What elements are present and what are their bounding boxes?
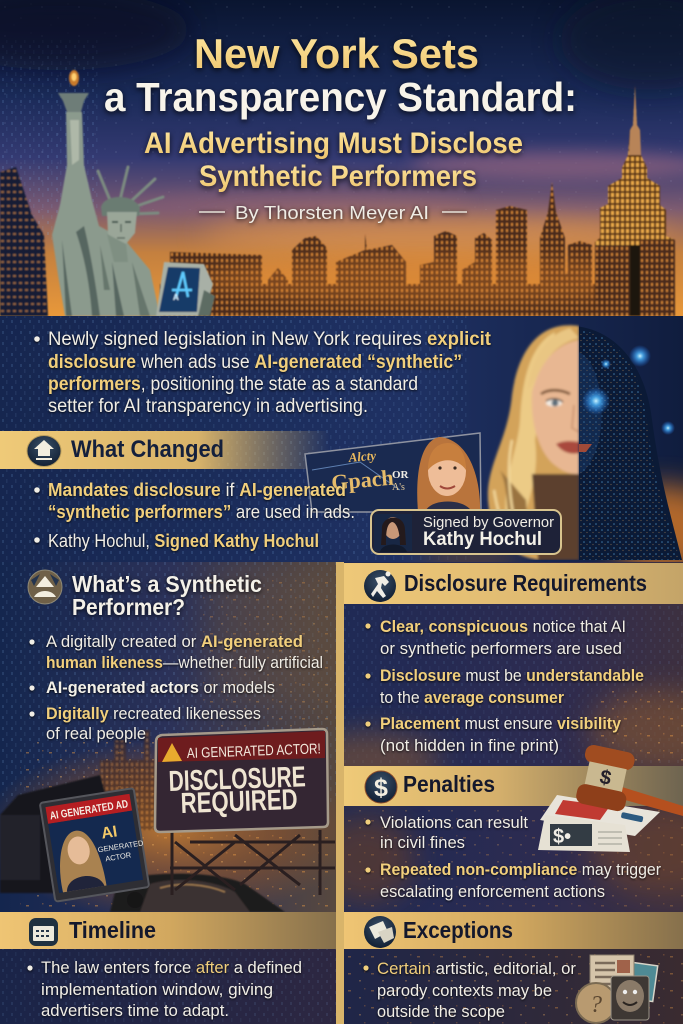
column divider bbox=[336, 562, 344, 1024]
ad mockup card: A's bbox=[392, 482, 405, 493]
monitor: AI generated ad: GENERATED bbox=[97, 838, 145, 854]
illustration: gavel on fine papers bbox=[538, 744, 683, 852]
icon: layered triangle bbox=[28, 570, 62, 604]
icon: AI tablet bbox=[156, 262, 215, 316]
monitor: AI generated ad: AI GENERATED AD bbox=[49, 798, 129, 822]
monitor: AI generated ad bbox=[40, 788, 151, 902]
text: intro bullet: performers, positioning the state as a standard bbox=[48, 374, 418, 395]
text: timeline bullet: The law enters force after a defined bbox=[41, 958, 302, 977]
icon: running figure bbox=[364, 570, 396, 602]
billboard: disclosure required: DISCLOSURE bbox=[168, 761, 306, 798]
icon: dollar coin bbox=[365, 771, 397, 803]
panel: exceptions bbox=[344, 912, 683, 1024]
text: definition bullets bbox=[29, 632, 323, 743]
text: definition bullets: human likeness—whether fully artificial bbox=[46, 653, 323, 672]
section header: Disclosure Requirements bbox=[344, 563, 683, 604]
text: intro bullet bbox=[34, 329, 492, 417]
title: Synthetic Performers bbox=[199, 160, 477, 193]
byline: By Thorsten Meyer AI bbox=[235, 203, 429, 223]
billboard scaffolding bbox=[170, 830, 335, 895]
section header: Penalties bbox=[344, 766, 683, 806]
machinery silhouette bbox=[0, 775, 285, 912]
section header: Exceptions bbox=[344, 912, 683, 949]
text: definition bullets: of real people bbox=[46, 724, 146, 743]
text: timeline bullet: implementation window, giving bbox=[41, 980, 273, 999]
section header: Timeline: Timeline bbox=[69, 917, 156, 943]
section header: Exceptions: Exceptions bbox=[403, 917, 513, 943]
ad mockup card: OR bbox=[392, 469, 410, 481]
monitor: AI generated ad: AI bbox=[100, 823, 119, 843]
title: a Transparency Standard: bbox=[104, 74, 577, 120]
billboard: disclosure required bbox=[155, 729, 328, 832]
panel: what's a synthetic performer bbox=[0, 562, 360, 920]
text: definition bullets: A digitally created or AI-generated bbox=[46, 632, 303, 651]
text: disclosure bullets: to the average consumer bbox=[380, 688, 564, 707]
section header: Timeline bbox=[0, 912, 336, 949]
icon: dollar coin: $ bbox=[374, 774, 388, 802]
panel: timeline bbox=[0, 912, 336, 1024]
icon: calendar bbox=[29, 918, 58, 946]
text: what changed bullets: Kathy Hochul, Signed Kathy Hochul bbox=[48, 531, 319, 551]
title: New York Sets bbox=[194, 30, 479, 77]
title: AI Advertising Must Disclose bbox=[144, 127, 523, 160]
text: timeline bullet: advertisers time to adapt. bbox=[41, 1001, 229, 1020]
text: exceptions bullet: parody contexts may be bbox=[377, 981, 552, 1000]
ad mockup card: Alcty bbox=[347, 448, 377, 465]
illustration: document and media collage: ? bbox=[590, 992, 602, 1018]
billboard: disclosure required: AI GENERATED ACTOR! bbox=[187, 741, 321, 762]
text: definition bullets: AI-generated actors or models bbox=[46, 678, 275, 697]
text: intro bullet: Newly signed legislation in New York requires explicit bbox=[48, 329, 492, 350]
monitor: AI generated ad: ACTOR bbox=[105, 850, 132, 863]
text: what changed bullets bbox=[34, 480, 355, 551]
text: definition bullets: Digitally recreated likenesses bbox=[46, 704, 261, 723]
text: disclosure bullets: Disclosure must be understandable bbox=[380, 666, 644, 685]
icon: warning triangle bbox=[162, 743, 182, 762]
text: penalties bullets: escalating enforcement actions bbox=[380, 882, 605, 901]
illustration: gavel on fine papers: $ bbox=[598, 766, 613, 790]
heading: what's a synthetic performer: Performer? bbox=[72, 594, 185, 620]
badge: signed by governor: Signed by Governor bbox=[423, 514, 554, 531]
section header: Disclosure Requirements: Disclosure Requirements bbox=[404, 570, 647, 596]
panel: disclosure requirements and penalties bbox=[344, 562, 683, 912]
text: exceptions bullet: outside the scope bbox=[377, 1002, 505, 1021]
text: disclosure bullets bbox=[365, 617, 644, 755]
text: penalties bullets: in civil fines bbox=[380, 833, 465, 852]
text: exceptions bullet: Certain artistic, editorial, or bbox=[377, 959, 576, 978]
text: exceptions bullet bbox=[363, 959, 576, 1021]
panel: intro summary bbox=[0, 316, 683, 580]
text: what changed bullets: Mandates disclosure if AI-generated bbox=[48, 480, 346, 500]
billboard: disclosure required: REQUIRED bbox=[180, 784, 298, 820]
text: intro bullet: disclosure when ads use AI-generated “synthetic” bbox=[48, 352, 462, 373]
text: disclosure bullets: (not hidden in fine print) bbox=[380, 736, 559, 755]
skyline buildings bbox=[0, 167, 600, 316]
text: what changed bullets: “synthetic performers” are used in ads. bbox=[48, 502, 355, 522]
text: penalties bullets bbox=[365, 813, 661, 901]
illustration: gavel on fine papers: $• bbox=[553, 826, 571, 848]
section header: What Changed: What Changed bbox=[71, 436, 224, 463]
ad mockup card bbox=[305, 433, 481, 512]
text: timeline bullet bbox=[27, 958, 302, 1020]
text: disclosure bullets: Clear, conspicuous notice that AI bbox=[380, 617, 626, 636]
badge: signed by governor bbox=[371, 510, 561, 554]
text: penalties bullets: Repeated non-compliance may trigger bbox=[380, 860, 661, 879]
title bbox=[104, 30, 577, 193]
text: intro bullet: setter for AI transparency in advertising. bbox=[48, 396, 368, 417]
section header: Penalties: Penalties bbox=[403, 771, 495, 797]
text: disclosure bullets: Placement must ensure visibility bbox=[380, 714, 622, 733]
text: disclosure bullets: or synthetic performers are used bbox=[380, 639, 622, 658]
illustration: document and media collage bbox=[576, 955, 658, 1023]
empire state building bbox=[595, 86, 675, 316]
statue of liberty bbox=[52, 70, 163, 316]
icon: house shield bbox=[27, 436, 61, 466]
heading: what's a synthetic performer bbox=[72, 571, 262, 620]
ad mockup card: Gpach bbox=[330, 465, 395, 495]
section header: What Changed bbox=[0, 431, 330, 469]
portrait: half human half digital woman bbox=[488, 325, 682, 560]
icon: AI tablet: A bbox=[173, 293, 179, 302]
badge: signed by governor: Kathy Hochul bbox=[423, 529, 542, 550]
heading: what's a synthetic performer: What’s a Synthetic bbox=[72, 571, 262, 597]
panel: hero skyline header bbox=[0, 0, 683, 316]
icon: masks bbox=[364, 916, 396, 948]
text: penalties bullets: Violations can result bbox=[380, 813, 528, 832]
